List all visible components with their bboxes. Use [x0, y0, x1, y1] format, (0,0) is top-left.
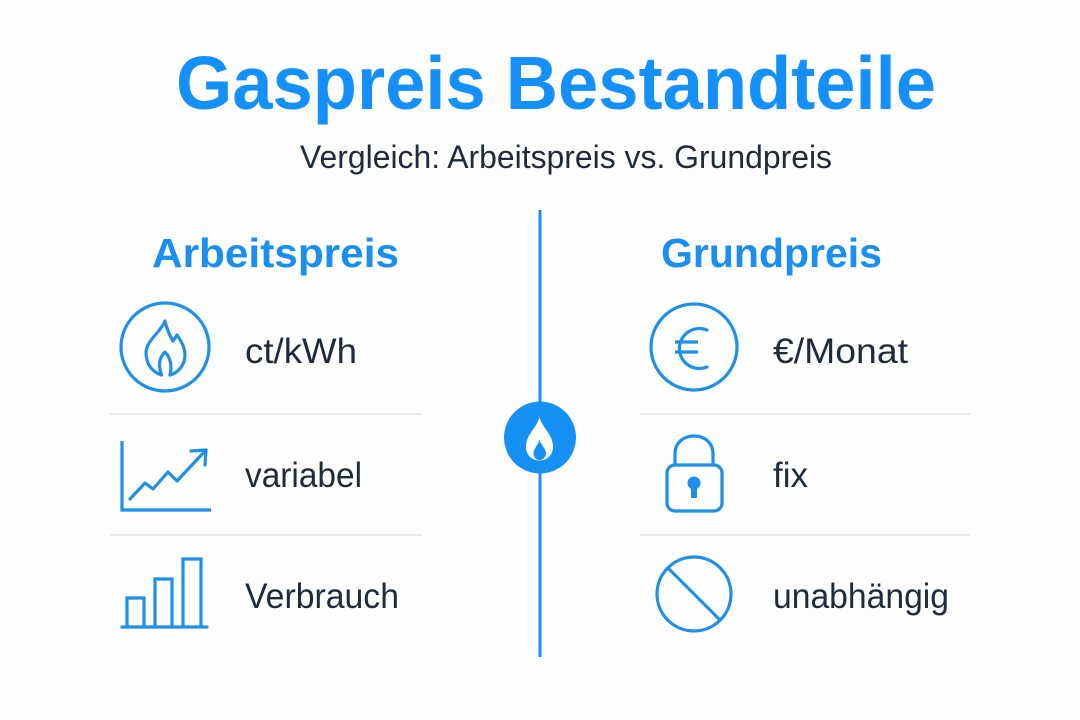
text: Verbrauch: Verbrauch — [245, 577, 399, 616]
panel: Arbeitspreis — [110, 230, 422, 627]
icon: euro in circle — [651, 304, 737, 390]
panel: Grundpreis — [640, 230, 970, 631]
text: variabel: variabel — [245, 456, 362, 495]
subtitle: Vergleich: Arbeitspreis vs. Grundpreis — [300, 139, 832, 175]
icon: rising line chart — [122, 441, 211, 510]
heading: Grundpreis: Grundpreis — [661, 230, 882, 276]
text: unabhängig: unabhängig — [773, 577, 949, 616]
text: €/Monat: €/Monat — [773, 332, 908, 371]
center divider line — [538, 210, 542, 657]
text: ct/kWh: ct/kWh — [245, 332, 357, 371]
title: Gaspreis Bestandteile — [176, 41, 936, 125]
text: fix: fix — [773, 456, 808, 495]
icon: padlock — [667, 436, 722, 511]
icon: center flame badge — [504, 402, 576, 474]
icon: flame in circle — [121, 303, 209, 391]
heading: Arbeitspreis: Arbeitspreis — [152, 230, 399, 276]
icon: prohibited sign — [657, 557, 731, 631]
icon: bar chart — [122, 559, 207, 627]
